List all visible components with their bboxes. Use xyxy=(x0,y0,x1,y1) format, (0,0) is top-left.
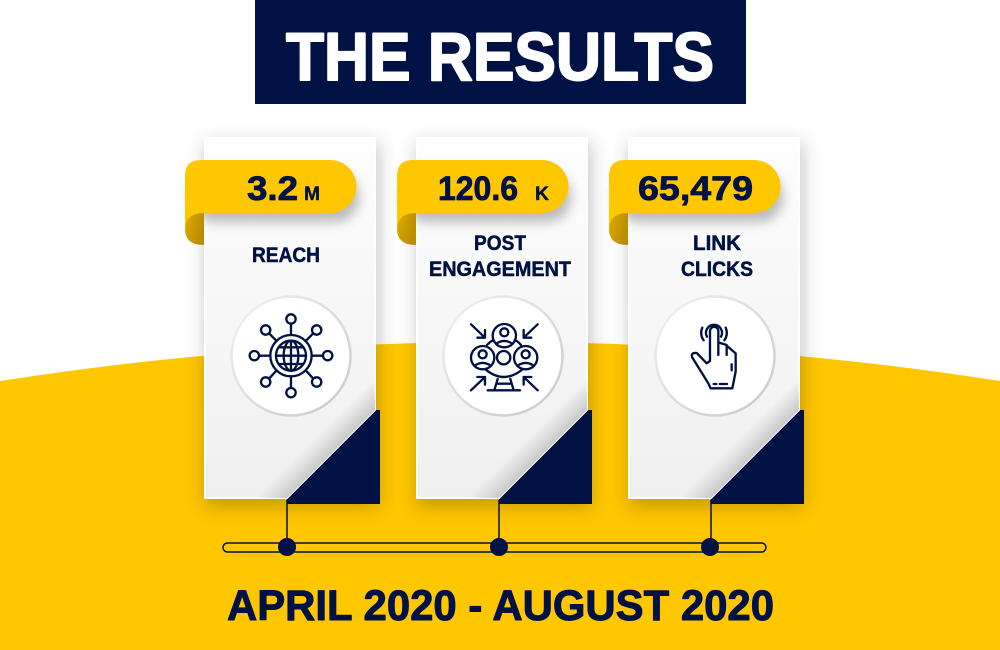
label: post engagement: ENGAGEMENT xyxy=(429,258,571,281)
yellow background curve xyxy=(0,342,1000,650)
date range: APRIL 2020 - AUGUST 2020 xyxy=(227,582,774,630)
icon: people converging xyxy=(471,324,538,390)
label: link clicks: LINK xyxy=(693,232,741,255)
title banner: THE RESULTS xyxy=(286,19,714,95)
label: link clicks: CLICKS xyxy=(681,258,753,281)
icon: globe network xyxy=(250,314,332,397)
icon: tapping hand xyxy=(692,325,736,388)
unit: K: K xyxy=(535,184,549,205)
value: 120.6: 120.6 xyxy=(438,170,518,208)
label: post engagement xyxy=(429,232,571,281)
panel: reach xyxy=(185,138,380,508)
panel: link clicks xyxy=(609,138,804,508)
timeline xyxy=(223,500,766,556)
value: 65,479: 65,479 xyxy=(638,170,753,208)
label: reach: REACH xyxy=(252,244,320,267)
title banner xyxy=(255,0,746,104)
label: link clicks xyxy=(681,232,753,281)
label: post engagement: POST xyxy=(474,232,526,255)
value: 3.2: 3.2 xyxy=(247,170,298,208)
unit: M: M xyxy=(304,184,320,205)
panel: post engagement xyxy=(397,138,592,508)
